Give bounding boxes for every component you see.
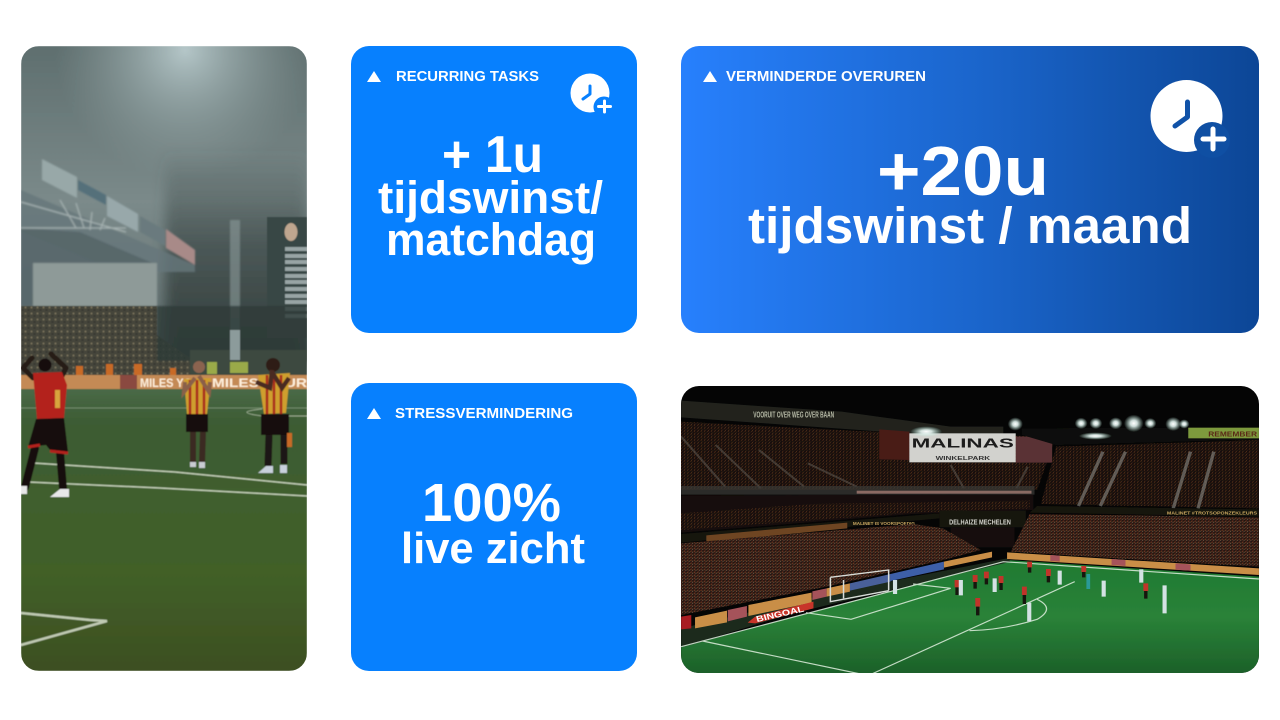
banner strip [681, 513, 939, 543]
rail [681, 486, 1035, 495]
boards: BINGOAL [755, 604, 806, 624]
card: verminderde overuren [681, 46, 1259, 333]
photo: players on foggy pitch [21, 46, 307, 671]
upper stand right [1041, 440, 1259, 508]
card: recurring tasks [351, 46, 637, 333]
stat text [401, 473, 585, 573]
goal [830, 570, 889, 602]
label: STRESSVERMINDERING [395, 406, 573, 422]
delhaize sign [939, 511, 1026, 527]
boards [681, 552, 1259, 629]
pitch grass [21, 388, 307, 671]
band right [1030, 506, 1259, 517]
stat text [378, 126, 604, 265]
lower crowd left [681, 524, 981, 615]
delhaize sign: DELHAIZE MECHELEN [949, 518, 1011, 527]
pitch [681, 560, 1259, 674]
scoreboard [266, 216, 307, 318]
malinas sign: MALINAS [912, 436, 1014, 450]
advertising boards: MILES YOU [140, 376, 200, 390]
pitch lines [21, 408, 307, 645]
malinas sign: WINKELPARK [936, 456, 991, 462]
advertising boards: MILES YOUR [212, 376, 307, 390]
floodlights [910, 415, 1189, 440]
stat text: + 1u [442, 126, 543, 184]
photo: stadium at night: MALINET #TROTSOPONZEKLEURS [1167, 511, 1258, 517]
icon: triangle bullet [367, 71, 381, 82]
player: number 8 [21, 354, 69, 497]
icon: triangle bullet [703, 71, 717, 82]
icon: clock plus [570, 74, 614, 118]
stat text [748, 132, 1192, 254]
label: VERMINDERDE OVERUREN [726, 69, 926, 85]
stat text: tijdswinst / maand [748, 197, 1192, 254]
crowd [21, 306, 190, 378]
player: middle [184, 361, 211, 468]
light pole [230, 220, 240, 362]
stat text: +20u [877, 132, 1049, 210]
photo: stadium at night [681, 386, 1259, 674]
roof band [681, 401, 1003, 435]
stat text: matchdag [386, 214, 596, 265]
mid tier [681, 495, 1033, 533]
stat text: 100% [422, 473, 561, 533]
upper stand left [681, 422, 1056, 490]
roof right [1026, 428, 1182, 444]
stat text: live zicht [401, 524, 585, 573]
lower crowd right [1011, 514, 1259, 567]
stand roof with sponsor boards [21, 159, 195, 306]
icon: triangle bullet [367, 408, 381, 419]
players [895, 562, 1165, 621]
pitch lines [681, 562, 1259, 674]
stairs left [681, 437, 1028, 488]
malinas sign [909, 433, 1016, 462]
stat text: tijdswinst/ [378, 172, 604, 223]
roof band: VOORUIT OVER WEG OVER BAAN [753, 410, 834, 419]
card: stressvermindering [351, 383, 637, 671]
label: RECURRING TASKS [396, 69, 539, 85]
icon: clock plus [1150, 80, 1230, 158]
player: right [256, 358, 292, 473]
photo: stadium at night: MALINET IS VOORSPOEDIG [853, 521, 915, 526]
photo: stadium at night: REMEMBER [1208, 430, 1257, 439]
advertising boards [21, 375, 307, 390]
